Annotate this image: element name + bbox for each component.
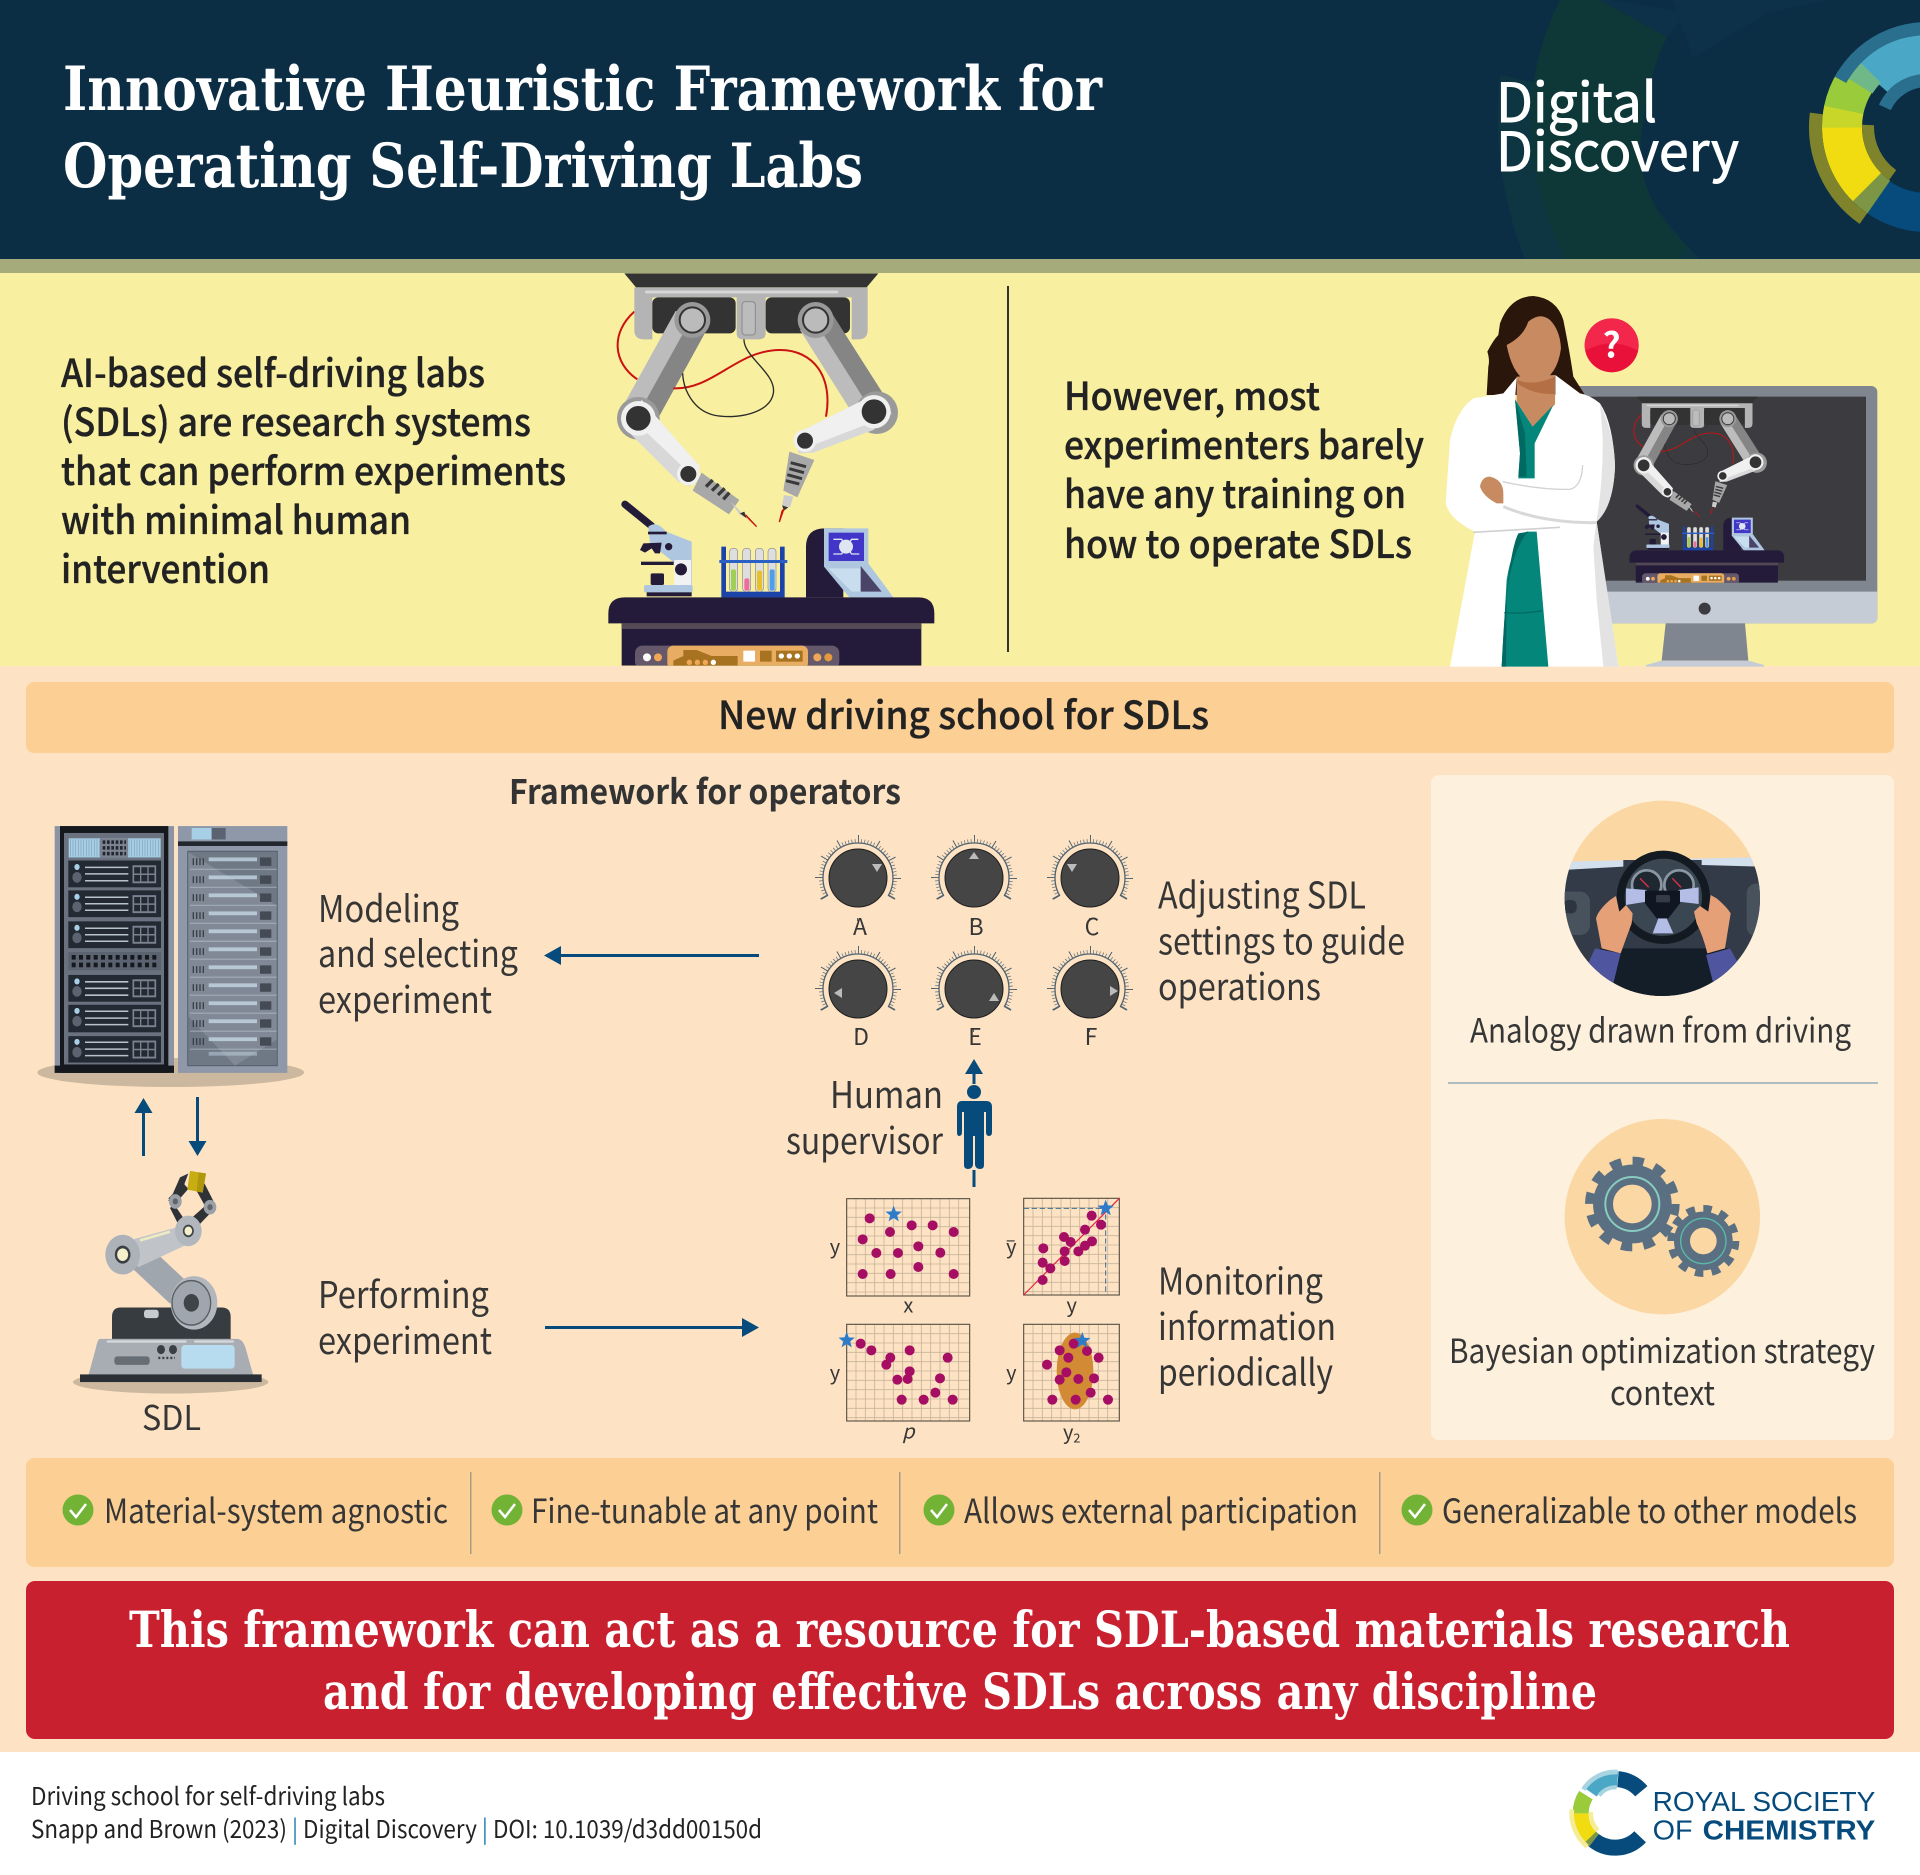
icon: gears [1565, 1119, 1760, 1314]
label: SDL: SDL [142, 1391, 201, 1440]
text: adjusting settings: settings to guide [1158, 912, 1405, 966]
dial F [1020, 950, 1160, 1052]
citation [31, 1778, 762, 1846]
title [63, 54, 1103, 202]
illustration: robotic lab [608, 273, 934, 669]
monitor [1570, 386, 1877, 667]
journal logo mark [1809, 22, 1920, 232]
text: monitoring: Monitoring [1158, 1252, 1323, 1306]
chart: y vs x [830, 1199, 970, 1319]
dial D [788, 950, 928, 1052]
text: performing experiment: Performing [318, 1266, 489, 1319]
text: modeling [318, 880, 518, 1024]
illustration: scientist and monitor [1446, 296, 1877, 667]
text: training gap: have any training on [1064, 464, 1406, 520]
arrow: experiment to charts [545, 1318, 759, 1337]
text: training gap: However, most [1064, 366, 1320, 422]
text: human supervisor: Human [830, 1066, 943, 1119]
icon: question mark: ? [1603, 317, 1621, 368]
Royal Society of Chemistry logo: ROYAL SOCIETY [1653, 1786, 1876, 1817]
chart: predicted vs y: y [1066, 1290, 1077, 1319]
journal name [1496, 59, 1739, 187]
header banner [0, 0, 1920, 273]
text: SDL definition [61, 343, 566, 595]
text: SDL definition: that can perform experiments [61, 441, 566, 497]
text: adjusting settings [1158, 866, 1405, 1011]
benefit 2: Fine-tunable at any point [531, 1484, 878, 1533]
benefit 4: Generalizable to other models [1442, 1484, 1857, 1533]
text: human supervisor: supervisor [786, 1112, 944, 1165]
text: monitoring [1158, 1252, 1336, 1396]
chart: y vs y2: 2 [1073, 1428, 1080, 1447]
heading bar [26, 682, 1894, 753]
Royal Society of Chemistry logo: CHEMISTRY [1703, 1814, 1876, 1845]
conclusion banner: and for developing effective SDLs across any discipline [323, 1662, 1597, 1721]
dial F: F [1085, 1018, 1098, 1052]
chart: y vs y2 [1006, 1324, 1119, 1447]
chart: y vs y2: y [1006, 1357, 1017, 1386]
panel: context [1431, 775, 1894, 1440]
chart: y vs x: y [830, 1231, 841, 1260]
chart: y vs p: y [830, 1357, 841, 1386]
citation: Snapp and Brown (2023) | Digital Discovery | DOI: 10.1039/d3dd00150d [31, 1811, 762, 1846]
text: modeling: Modeling [318, 880, 459, 933]
title: Innovative Heuristic Framework for [63, 54, 1103, 125]
dial A [788, 839, 928, 942]
dial E: E [968, 1018, 982, 1052]
title: Operating Self-Driving Labs [63, 131, 863, 202]
text: monitoring: information [1158, 1298, 1336, 1351]
panel: benefits [26, 1458, 1894, 1567]
journal name: Digital [1496, 59, 1657, 138]
text: SDL definition: AI-based self-driving labs [61, 343, 485, 399]
benefit 3: Allows external participation [964, 1484, 1358, 1533]
chart: y vs x: x [903, 1290, 913, 1319]
conclusion banner [26, 1581, 1894, 1739]
dial C [1020, 839, 1160, 942]
icon: steering wheel [1564, 800, 1760, 996]
icon: question mark [1585, 317, 1639, 372]
dials [788, 839, 1160, 1052]
illustration: SDL robot arm [73, 1171, 268, 1394]
dial D: D [853, 1018, 869, 1052]
Royal Society of Chemistry logo [1554, 1752, 1876, 1874]
chart: y vs y2: y [1063, 1416, 1073, 1445]
text: training gap [1064, 366, 1424, 570]
dial A: A [853, 908, 867, 942]
charts [830, 1198, 1119, 1447]
text: adjusting settings: operations [1158, 958, 1321, 1011]
panel: intro [0, 273, 1920, 669]
text: adjusting settings: Adjusting SDL [1158, 866, 1366, 920]
dial E [904, 950, 1044, 1052]
icon: human supervisor [957, 1059, 992, 1187]
subheading: Framework for operators [509, 765, 901, 814]
chart: predicted vs y [1006, 1198, 1119, 1319]
text: performing experiment: experiment [318, 1312, 492, 1365]
text: performing experiment [318, 1266, 492, 1365]
text: SDL definition: with minimal human [61, 490, 411, 546]
text: SDL definition: intervention [61, 539, 270, 595]
heading bar: New driving school for SDLs [718, 685, 1209, 741]
chart: predicted vs y: y [1006, 1231, 1017, 1260]
Royal Society of Chemistry logo: OF [1653, 1814, 1693, 1845]
benefit 1: Material-system agnostic [104, 1484, 448, 1533]
dial C: C [1085, 908, 1099, 942]
arrows: server to SDL [134, 1097, 206, 1156]
caption: Bayesian: Bayesian optimization strategy [1449, 1324, 1875, 1373]
text: modeling: and selecting [318, 925, 518, 978]
text: SDL definition: (SDLs) are research systems [61, 392, 531, 448]
dial B: B [968, 908, 984, 942]
caption: Bayesian: context [1610, 1366, 1715, 1415]
text: modeling: experiment [318, 971, 492, 1024]
journal name: Discovery [1496, 108, 1739, 187]
text: training gap: how to operate SDLs [1064, 514, 1412, 570]
text: training gap: experimenters barely [1064, 415, 1424, 471]
caption: Bayesian [1449, 1324, 1875, 1415]
dial B [904, 839, 1044, 942]
chart: y vs p: p [902, 1415, 916, 1444]
text: monitoring: periodically [1158, 1344, 1333, 1396]
arrow: dials to modeling [544, 946, 759, 965]
illustration: server racks [37, 826, 304, 1087]
chart: y vs p [830, 1324, 970, 1444]
footer [0, 1752, 1920, 1875]
text: human supervisor [786, 1066, 944, 1165]
caption: driving: Analogy drawn from driving [1470, 1004, 1851, 1052]
citation: Driving school for self-driving labs [31, 1778, 385, 1813]
